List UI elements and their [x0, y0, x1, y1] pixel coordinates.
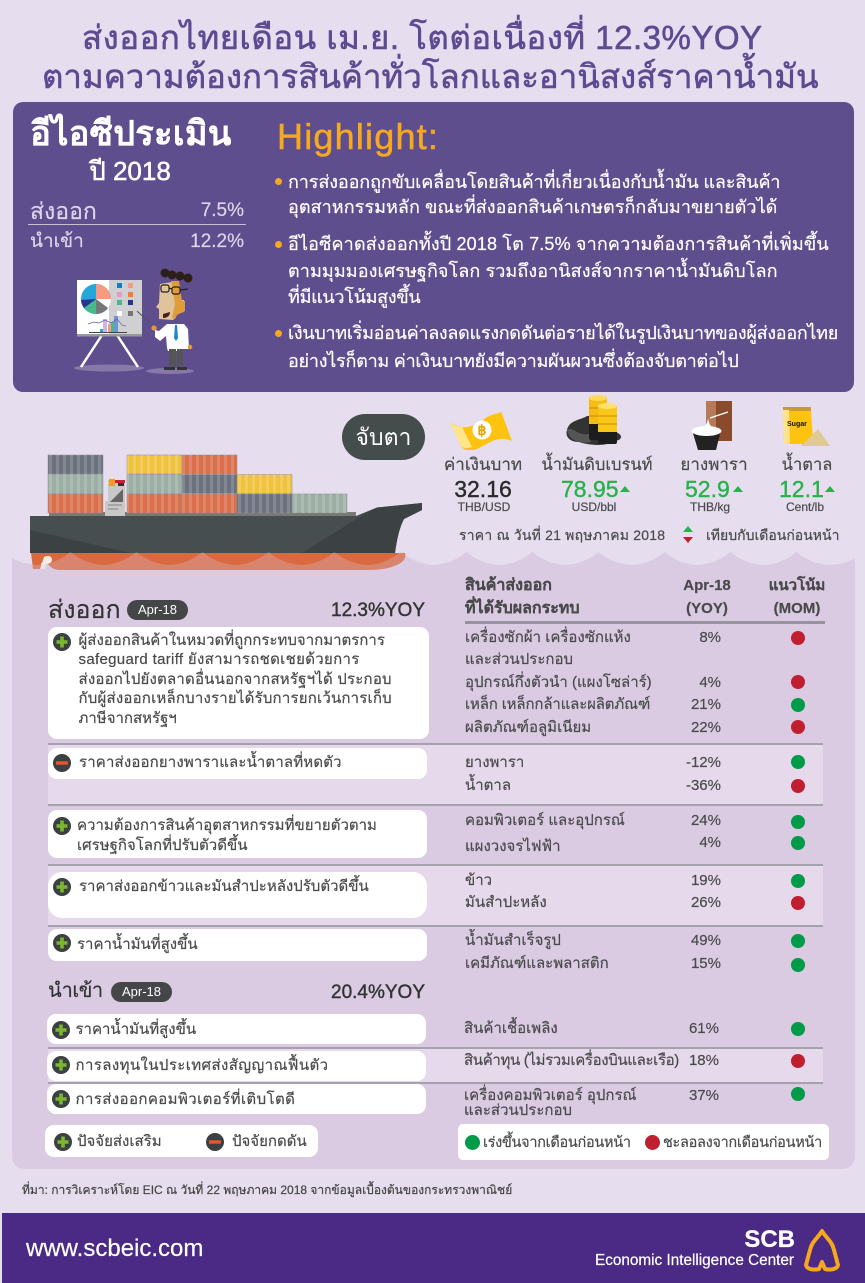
indicator: sugar [779, 407, 835, 514]
indicator: brent oil [541, 395, 653, 514]
table header: Apr-18 [683, 577, 731, 594]
table row: rubber [465, 754, 805, 771]
table header: ที่ได้รับผลกระทบ [465, 600, 580, 617]
table row: fuel [465, 1018, 810, 1040]
table row: rubber: ยางพารา [465, 754, 524, 771]
bullet 2: ตามมุมมองเศรษฐกิจโลก รวมถึงอานิสงส์จากราคาน้ำมันดิบโลก [288, 261, 778, 281]
icon: baht flag: ฿ [478, 422, 487, 438]
factor box: safeguard: ผู้ส่งออกสินค้าในหมวดที่ถูกกระทบจากมาตรการ [78, 632, 385, 649]
table row: cassava: 26% [691, 894, 721, 911]
indicator: baht: ค่าเงินบาท [444, 455, 522, 474]
factor box: oil price [48, 929, 427, 961]
table row: capital goods: สินค้าทุน (ไม่รวมเครื่องบินและเรือ) [464, 1052, 679, 1069]
export heading [48, 596, 425, 624]
bullet 1: อุตสาหกรรมหลัก ขณะที่ส่งออกสินค้าเกษตรก็กลับมาขยายตัวได้ [288, 197, 777, 217]
table header: (YOY) [686, 600, 728, 617]
table rows: exports [465, 626, 805, 646]
export heading: ส่งออก [48, 596, 121, 624]
icon: plus [52, 1056, 70, 1074]
table row: aluminium: 22% [691, 719, 721, 736]
footer band [2, 1213, 865, 1283]
icon: plus [53, 934, 71, 952]
bullet 3 [275, 320, 838, 371]
factor box: computer exports [46, 1084, 426, 1114]
illustration: container ship [30, 454, 422, 570]
row bands [48, 743, 839, 1271]
heading: highlight: Highlight: [277, 116, 439, 157]
bullet 2: อีไอซีคาดส่งออกทั้งปี 2018 โต 7.5% จากความต้องการสินค้าที่เพิ่มขึ้น [288, 234, 829, 254]
table row continuation: และส่วนประกอบ [465, 651, 573, 668]
legend: factors: ปัจจัยกดดัน [232, 1133, 307, 1150]
indicator: sugar: น้ำตาล [782, 456, 832, 474]
bullet 1 [275, 168, 780, 218]
export heading: 12.3%YOY [331, 600, 425, 621]
table row: steel [465, 694, 805, 713]
table row: fuel: สินค้าเชื้อเพลิง [464, 1020, 558, 1037]
indicator: sugar: 12.1 [779, 476, 824, 502]
table row: chemicals: 15% [691, 955, 721, 972]
table row: chemicals: เคมีภัณฑ์และพลาสติก [465, 955, 609, 972]
table header: แนวโน้ม [769, 577, 825, 594]
table row: computer parts: เครื่องคอมพิวเตอร์ อุปกรณ์ [464, 1087, 636, 1104]
table row: steel: เหล็ก เหล็กกล้าและผลิตภัณฑ์ [465, 696, 650, 713]
price note: เทียบกับเดือนก่อนหน้า [706, 527, 839, 543]
table row: computers: คอมพิวเตอร์ และอุปกรณ์ [465, 812, 625, 829]
indicator: rubber: THB/kg [690, 500, 730, 514]
table rows: exports: 8% [699, 629, 721, 646]
table row: chemicals [465, 953, 810, 975]
factor box: oil price imports: ราคาน้ำมันที่สูงขึ้น [76, 1021, 196, 1038]
import heading: Apr-18 [122, 984, 161, 999]
indicator: baht: 32.16 [454, 476, 512, 502]
table row: capital goods [465, 1050, 810, 1072]
table row: rice: ข้าว [465, 872, 492, 889]
factor box: industrial demand [48, 810, 427, 858]
bullet 1: การส่งออกถูกขับเคลื่อนโดยสินค้าที่เกี่ยวเนื่องกับน้ำมัน และสินค้า [288, 172, 780, 192]
forecast: exports: ส่งออก [30, 198, 97, 224]
table row: semiconductors: 4% [699, 674, 721, 691]
indicator: rubber: 52.9 [685, 476, 730, 502]
table row: aluminium [465, 718, 805, 736]
factor box: rice and cassava [48, 872, 427, 918]
brand text: Economic Intelligence Center [595, 1252, 794, 1269]
table row: cassava [465, 894, 805, 911]
table row: rice: 19% [691, 872, 721, 889]
factor box: safeguard: safeguard tariff ยังสามารถชดเชยด้วยการ [78, 651, 360, 668]
indicator: rubber [680, 401, 748, 514]
title: ตามความต้องการสินค้าทั่วโลกและอานิสงส์ราคาน้ำมัน [42, 58, 818, 95]
price note: ราคา ณ วันที่ 21 พฤษภาคม 2018 [459, 527, 665, 543]
factor box: oil price: ราคาน้ำมันที่สูงขึ้น [77, 936, 198, 953]
indicator: brent oil: USD/bbl [572, 500, 616, 514]
factor box: investment [46, 1051, 426, 1081]
water overlay [12, 552, 430, 575]
forecast: imports [30, 231, 244, 252]
indicator: rubber: ยางพารา [680, 455, 748, 474]
table row: circuit boards [465, 834, 805, 855]
icon: oil barrels [566, 395, 621, 445]
legend: factors: ปัจจัยส่งเสริม [77, 1133, 162, 1150]
table row: steel: 21% [691, 696, 721, 713]
table row: computer parts: และส่วนประกอบ [464, 1102, 572, 1119]
legend: factors [45, 1125, 318, 1157]
badge: watch [342, 414, 425, 460]
table row: capital goods: 18% [689, 1052, 719, 1069]
factor box: rice and cassava: ราคาส่งออกข้าวและมันสำปะหลังปรับตัวดีขึ้น [79, 878, 369, 895]
table row: sugar: น้ำตาล [465, 777, 511, 794]
factor box: industrial demand: ความต้องการสินค้าอุตสาหกรรมที่ขยายตัวตาม [77, 817, 377, 834]
table row: computer parts: 37% [689, 1087, 719, 1104]
table row: aluminium: ผลิตภัณฑ์อลูมิเนียม [465, 719, 591, 736]
icon: sugar bag [783, 407, 830, 446]
table row: computers [465, 812, 805, 830]
icon: plus [52, 1021, 70, 1039]
legend: trend dots: เร่งขึ้นจากเดือนก่อนหน้า [483, 1135, 631, 1151]
website: www.scbeic.com [26, 1235, 203, 1262]
panel: highlight [13, 102, 854, 392]
table row: rice [465, 872, 805, 889]
table header: (MOM) [774, 600, 820, 617]
table row: sugar: -36% [686, 777, 721, 794]
badge: watch: จับตา [356, 424, 411, 450]
factor box: safeguard: กับผู้ส่งออกเหล็กบางรายได้รับการยกเว้นการเก็บ [78, 690, 392, 707]
icon: plus [53, 633, 71, 651]
price note [459, 526, 839, 543]
title: ส่งออกไทยเดือน เม.ย. โตต่อเนื่องที่ 12.3%YOY [82, 19, 763, 56]
table row: refined oil [465, 928, 805, 950]
table header: สินค้าส่งออก [465, 577, 552, 594]
indicator: brent oil: น้ำมันดิบเบรนท์ [541, 456, 653, 474]
icon: rubber tree and cup [692, 401, 732, 450]
icon: baht flag [450, 411, 512, 450]
factor box: safeguard: ภาษีจากสหรัฐฯ [78, 710, 177, 727]
table row: cassava: มันสำปะหลัง [465, 894, 547, 911]
factor box: oil price imports [46, 1014, 426, 1044]
factor box: industrial demand: เศรษฐกิจโลกที่ปรับตัวดีขึ้น [77, 837, 247, 854]
factor box: rubber and sugar price: ราคาส่งออกยางพาราและน้ำตาลที่หดตัว [79, 754, 342, 771]
table row: computers: 24% [691, 812, 721, 829]
factor box: safeguard: ส่งออกไปยังตลาดอื่นนอกจากสหรัฐฯได้ ประกอบ [78, 671, 392, 688]
bullet 3: เงินบาทเริ่มอ่อนค่าลงลดแรงกดดันต่อรายได้ในรูปเงินบาทของผู้ส่งออกไทย [288, 323, 838, 343]
table header [465, 575, 825, 624]
title [42, 14, 818, 95]
factor box: computer exports: การส่งออกคอมพิวเตอร์ที่เติบโตดี [76, 1091, 295, 1108]
table row: refined oil: 49% [691, 932, 721, 949]
indicator: sugar: Cent/lb [786, 500, 824, 514]
forecast: exports: 7.5% [201, 200, 244, 221]
forecast: exports [28, 196, 246, 225]
table row: circuit boards: 4% [699, 834, 721, 851]
indicator: baht [444, 411, 522, 514]
forecast: imports: นำเข้า [30, 231, 84, 252]
brand text: SCB [744, 1226, 795, 1253]
forecast: imports: 12.2% [190, 231, 244, 252]
icon: plus [52, 1090, 70, 1108]
table rows: exports: เครื่องซักผ้า เครื่องซักแห้ง [465, 629, 631, 646]
indicator: brent oil: 78.95 [561, 476, 619, 502]
factor box: safeguard [48, 627, 428, 739]
icon: plus [53, 817, 71, 835]
import heading: 20.4%YOY [331, 982, 425, 1003]
indicator: baht: THB/USD [458, 500, 510, 514]
panel: data table background [12, 552, 855, 1169]
table row: refined oil: น้ำมันสำเร็จรูป [465, 932, 561, 949]
heading: EIC forecast: อีไอซีประเมิน [30, 115, 232, 153]
table row: computer parts [465, 1085, 810, 1123]
forecast year: ปี 2018 [89, 156, 171, 186]
export heading: Apr-18 [138, 602, 177, 617]
import heading [48, 980, 425, 1003]
brand text [592, 1225, 797, 1273]
icon: plus [53, 878, 71, 896]
source note: ที่มา: การวิเคราะห์โดย EIC ณ วันที่ 22 พฤษภาคม 2018 จากข้อมูลเบื้องต้นของกระทรวงพาณิชย์ [22, 1183, 512, 1197]
import heading: นำเข้า [48, 980, 103, 1002]
table row: semiconductors: อุปกรณ์กึ่งตัวนำ (แผงโซล่าร์) [465, 674, 652, 691]
table row: circuit boards: แผงวงจรไฟฟ้า [465, 838, 561, 855]
table row: fuel: 61% [689, 1020, 719, 1037]
bullet 2: ที่มีแนวโน้มสูงขึ้น [288, 287, 420, 307]
legend: trend dots [458, 1124, 829, 1160]
icon: SCB logo [803, 1228, 841, 1272]
table row: semiconductors [465, 671, 805, 692]
factor box: investment: การลงทุนในประเทศส่งสัญญาณฟื้นตัว [76, 1057, 328, 1074]
illustration: presenter with chart [74, 268, 194, 374]
factor box: rubber and sugar price [48, 748, 427, 779]
legend: trend dots: ชะลอลงจากเดือนก่อนหน้า [663, 1135, 822, 1151]
icon: sugar bag: Sugar [787, 421, 807, 428]
table row: sugar [465, 774, 805, 794]
icon: minus [53, 754, 71, 772]
bullet 3: อย่างไรก็ตาม ค่าเงินบาทยังมีความผันผวนซึ่งต้องจับตาต่อไป [288, 351, 739, 371]
table row: rubber: -12% [686, 754, 721, 771]
bullet 2 [275, 230, 829, 308]
